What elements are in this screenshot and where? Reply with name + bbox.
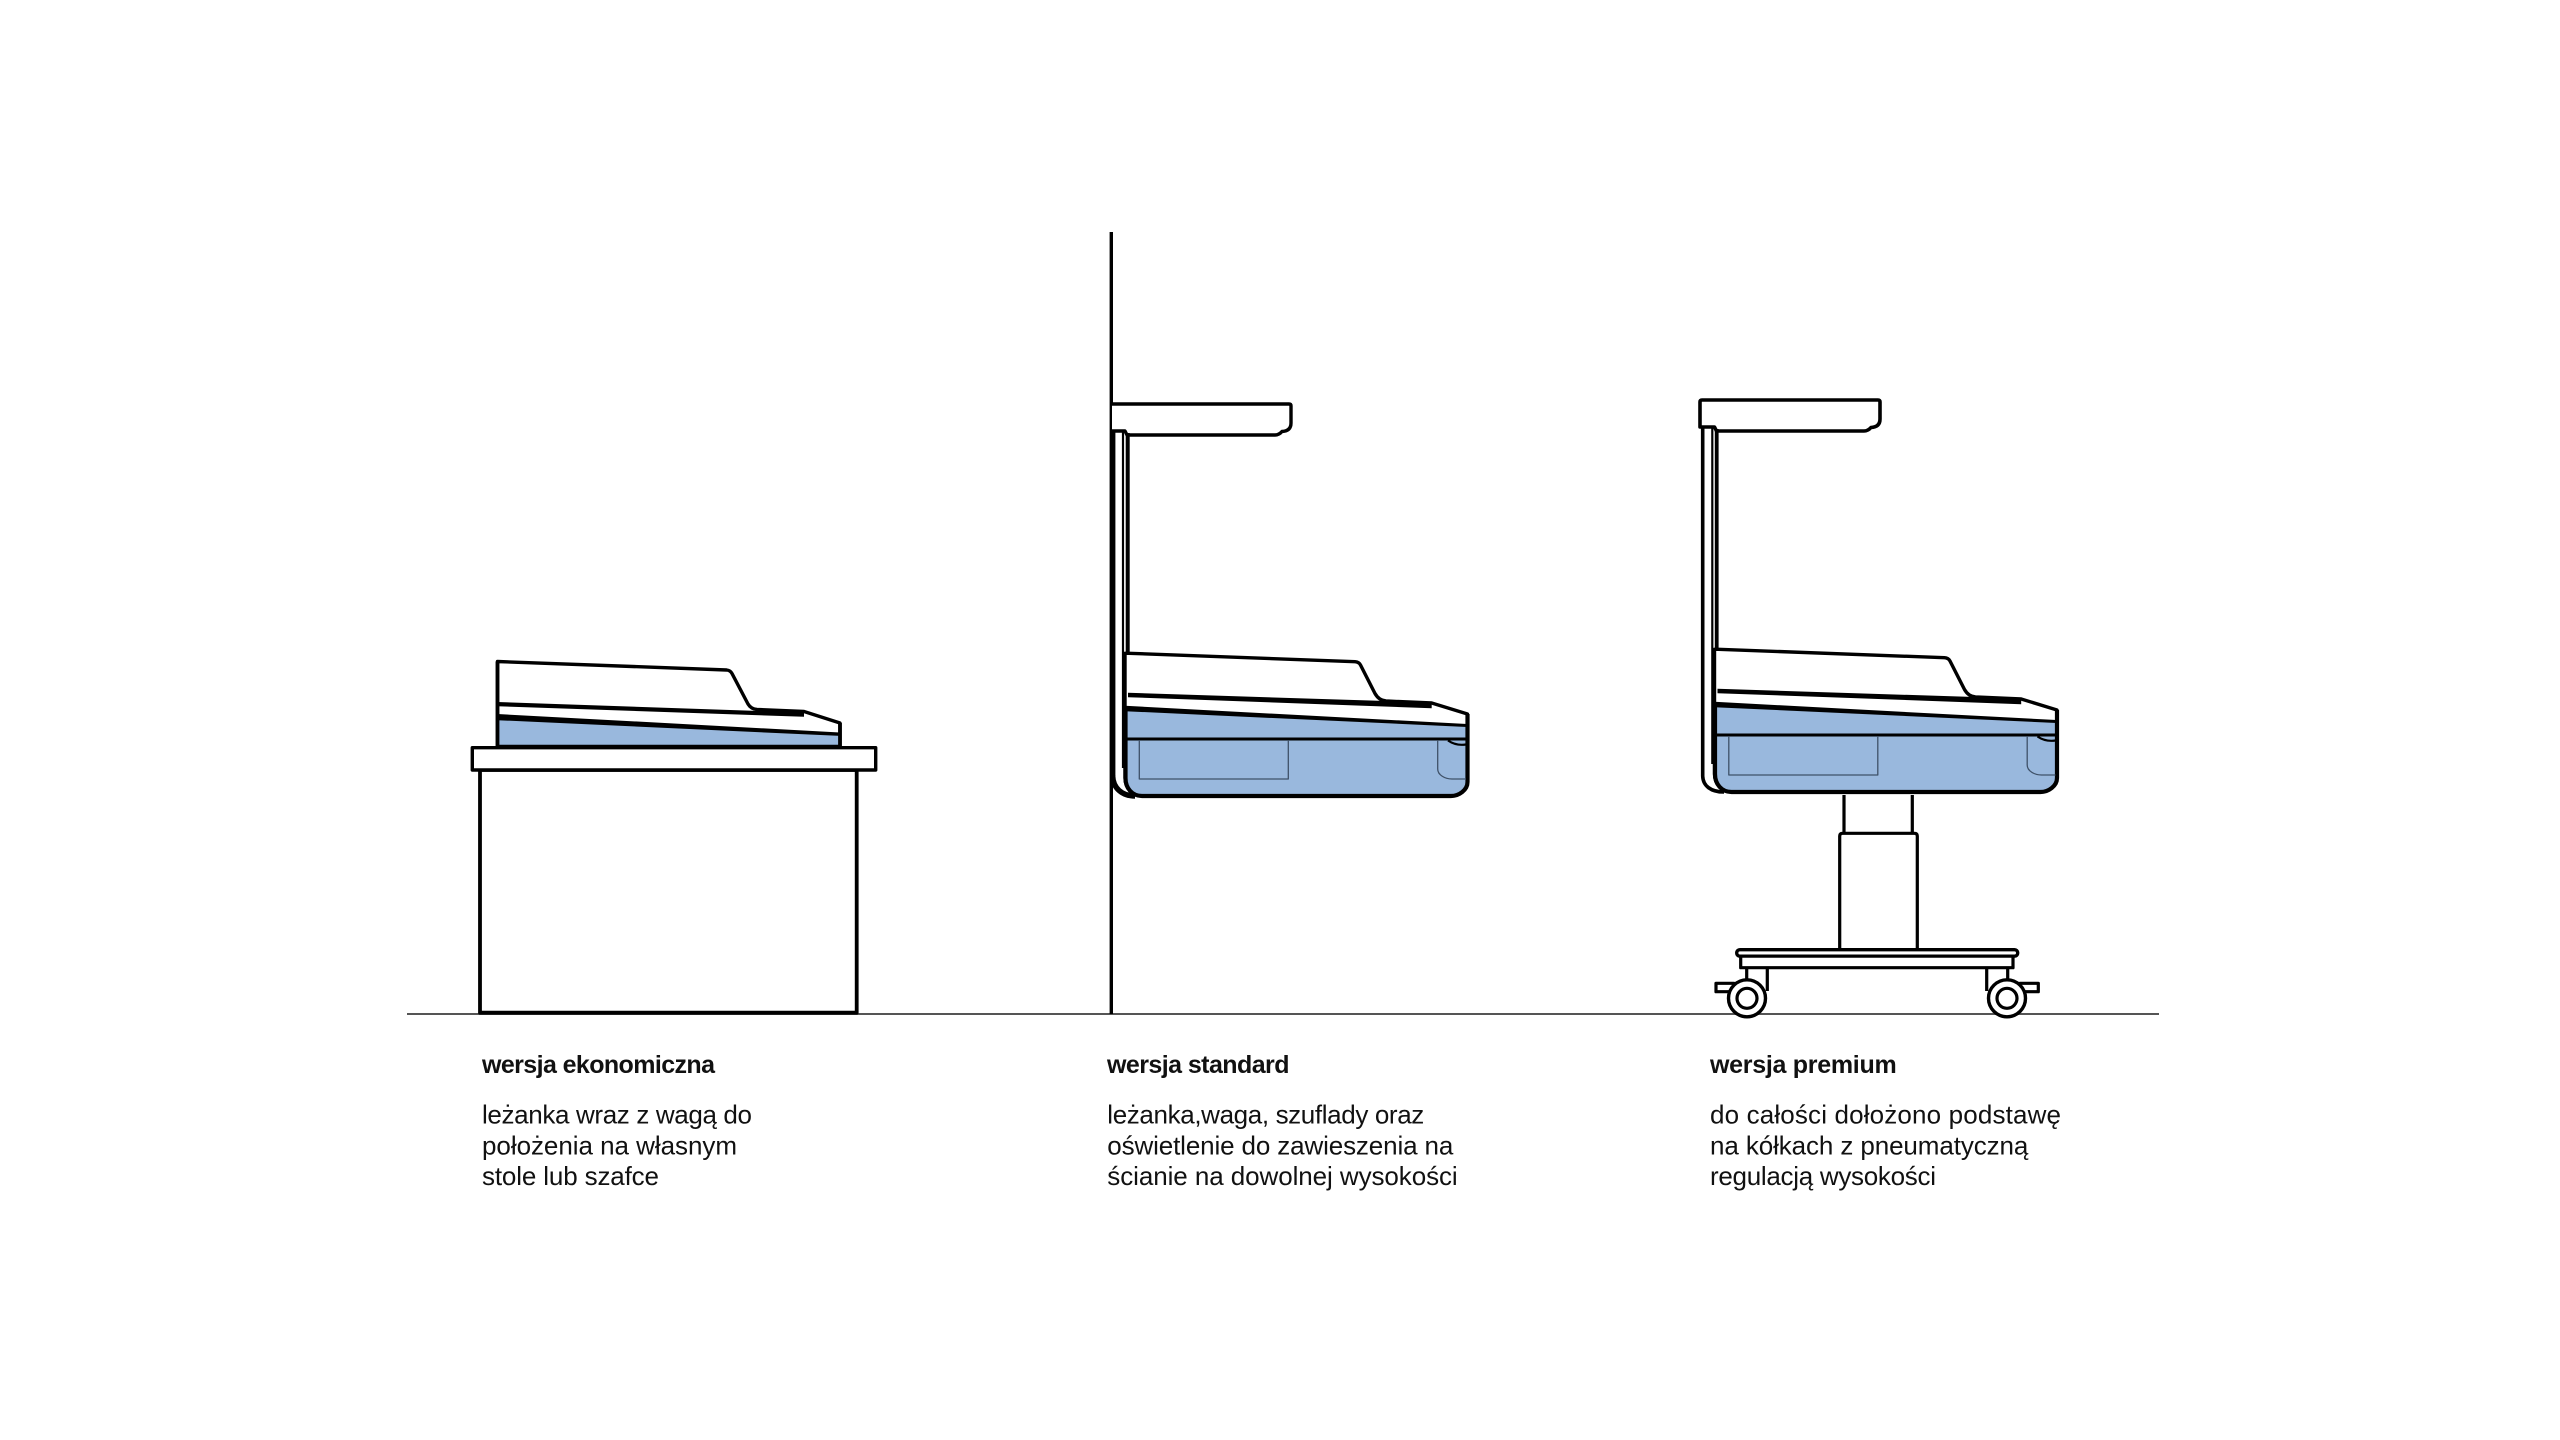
mattress line: [1128, 693, 1432, 708]
bed shell: [1125, 653, 1468, 796]
mattress line: [1718, 689, 2021, 704]
description: stole lub szafce: [482, 1161, 659, 1191]
bed shell: [1714, 649, 2057, 792]
description: regulacją wysokości: [1710, 1161, 1936, 1191]
description: leżanka wraz z wagą do: [482, 1099, 752, 1129]
illustration: premium version on wheeled base: [1700, 400, 2057, 1017]
handle pocket: [2027, 736, 2056, 775]
body outline: [1126, 708, 1468, 796]
drawer: [1729, 736, 1878, 775]
lamp head: [1700, 400, 1880, 431]
blue base: [499, 719, 839, 746]
base tilt line: [1714, 702, 2056, 723]
right caster: [1987, 968, 2038, 1017]
base frame: [1741, 956, 2013, 968]
body outline: [1715, 704, 2057, 792]
description: [482, 1099, 752, 1191]
bed edges: [498, 662, 840, 747]
base plate: [1737, 950, 2018, 956]
caption: premium version: [1709, 1051, 2061, 1191]
handle pocket: [1438, 740, 1466, 779]
description: na kółkach z pneumatyczną: [1710, 1130, 2029, 1160]
base tilt line: [498, 714, 840, 736]
illustration: standard version on wall: [1111, 232, 1468, 1014]
heading: wersja standard: [1106, 1051, 1290, 1079]
divider: [1714, 734, 2056, 736]
table top: [472, 748, 876, 770]
caption: standard version: [1106, 1051, 1458, 1191]
blue body: [1126, 711, 1466, 794]
base tilt line: [1125, 706, 1467, 727]
description: do całości dołożono podstawę: [1710, 1099, 2061, 1129]
description: ścianie na dowolnej wysokości: [1107, 1161, 1458, 1191]
upper column: [1844, 795, 1912, 833]
blue body: [1716, 707, 2056, 790]
description: położenia na własnym: [482, 1130, 737, 1160]
stand arms: [1113, 431, 1135, 796]
illustration: economy version on table: [472, 662, 876, 1013]
lower column: [1840, 833, 1917, 949]
description: [1107, 1099, 1458, 1191]
left caster: [1716, 968, 1767, 1017]
description: [1710, 1099, 2061, 1191]
mattress line: [498, 702, 804, 717]
description: oświetlenie do zawieszenia na: [1107, 1130, 1454, 1160]
description: leżanka,waga, szuflady oraz: [1107, 1099, 1424, 1129]
bed shell: [498, 662, 840, 747]
heading: wersja premium: [1709, 1051, 1897, 1079]
drawer: [1139, 740, 1288, 779]
caption: economy version: [481, 1051, 752, 1191]
stand arms: [1703, 427, 1724, 792]
lamp head: [1112, 404, 1291, 435]
divider: [1125, 738, 1467, 740]
heading: wersja ekonomiczna: [481, 1051, 716, 1079]
table body: [480, 770, 857, 1013]
wall: [1110, 232, 1113, 1014]
